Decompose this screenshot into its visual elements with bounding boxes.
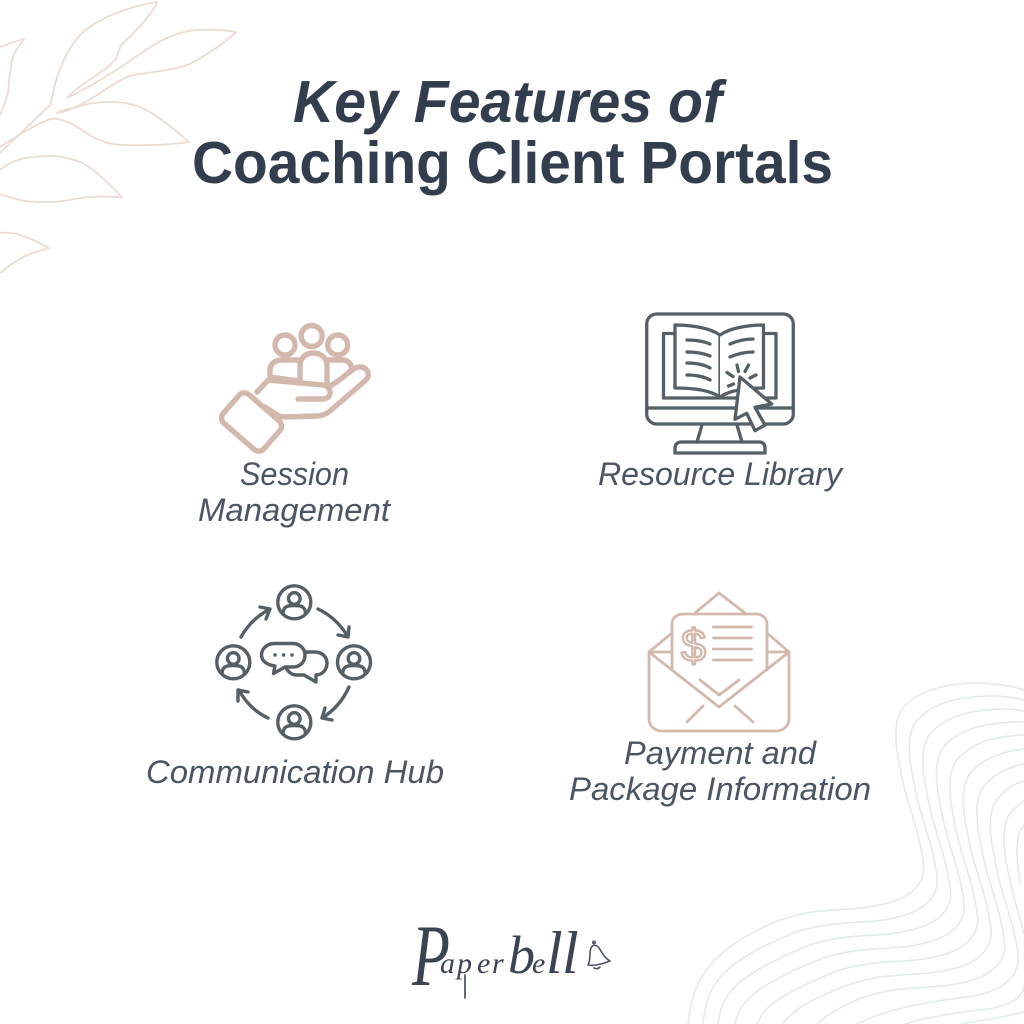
label: payment and package information: Package Information [569, 771, 871, 807]
icon: dollar sign: $ [681, 620, 706, 671]
feature: resource library [598, 314, 844, 492]
logo: Paperbell: a [440, 947, 455, 980]
feature: session management [198, 326, 391, 528]
feature: communication hub [146, 586, 444, 790]
logo: Paperbell: r [492, 947, 504, 980]
label: session management: Session [240, 456, 349, 492]
decorative leaves [0, 2, 236, 273]
logo: Paperbell: e [477, 947, 490, 980]
feature: payment and package information [569, 593, 871, 807]
logo: Paperbell: p [455, 947, 472, 980]
decorative contour waves [688, 683, 1024, 1024]
logo: Paperbell: l [562, 920, 579, 986]
title [192, 69, 833, 196]
label: payment and package information: Payment and [624, 735, 817, 771]
title: Key Features of [293, 69, 727, 135]
logo: Paperbell: b [508, 925, 535, 985]
icon: hand holding people [219, 326, 368, 454]
label: resource library: Resource Library [598, 456, 844, 492]
logo: Paperbell [411, 908, 610, 1005]
icon: bell [588, 941, 610, 969]
icon: envelope with invoice [649, 593, 789, 731]
icon: monitor with book and cursor [647, 314, 793, 453]
title: Coaching Client Portals [192, 130, 833, 196]
label: session management: Management [198, 492, 391, 528]
icon: people in communication cycle [217, 586, 370, 739]
logo: Paperbell: e [532, 947, 545, 980]
logo: Paperbell: l [546, 920, 563, 986]
label: communication hub: Communication Hub [146, 754, 444, 790]
logo: Paperbell: P [411, 908, 450, 1005]
